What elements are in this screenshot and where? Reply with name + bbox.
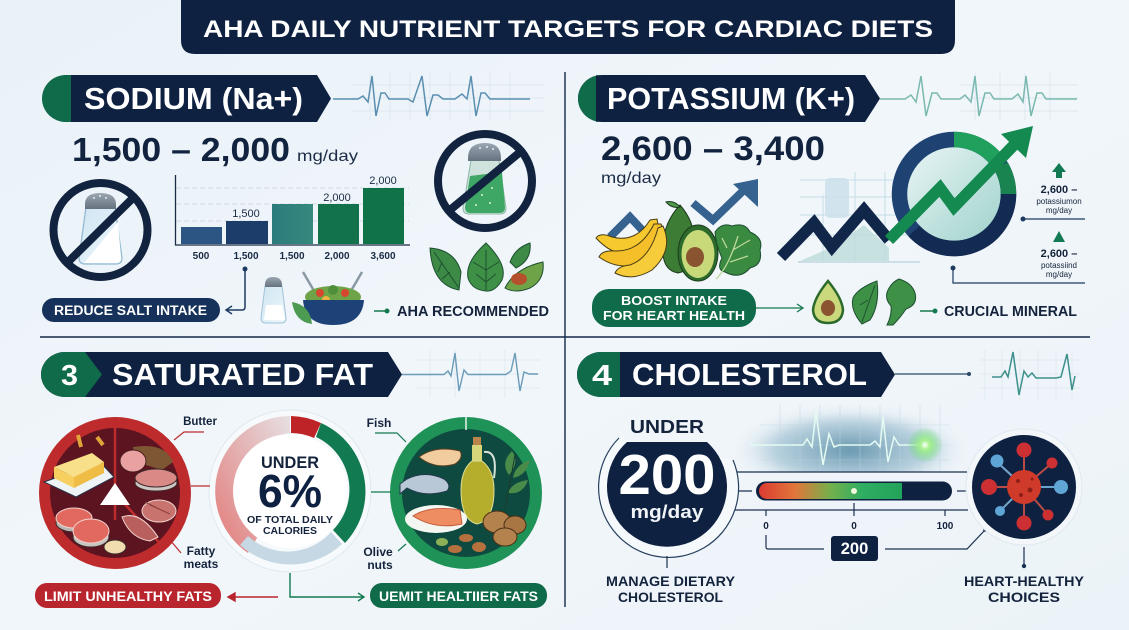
chart: 6 percent donut: UNDER	[261, 453, 319, 472]
callout: lower range label: mg/day	[1046, 270, 1072, 279]
callout: upper range label: mg/day	[1046, 206, 1072, 215]
callout: lower range label: potassiind	[1041, 261, 1077, 270]
chart: healthy fats circle	[390, 417, 542, 569]
callout: upper range label: potassiumon	[1036, 197, 1082, 206]
stat: under 200 mg/day: UNDER	[630, 417, 704, 437]
ECG glow monitor	[746, 405, 953, 472]
arrow: chart to callout	[226, 266, 248, 314]
label: heart-healthy choices: HEART-HEALTHY	[964, 573, 1085, 589]
label: olive nuts: Olive	[363, 545, 393, 559]
sodium ECG trace	[333, 73, 544, 120]
callout: boost intake: FOR HEART HEALTH	[603, 308, 745, 323]
callout: reduce salt intake	[42, 298, 220, 322]
gauge scale	[763, 503, 987, 549]
bar chart: 1,500	[232, 208, 260, 220]
potassium ECG trace	[880, 73, 1078, 120]
gauge scale: 0	[851, 521, 857, 532]
arrow: blue rising trend	[610, 179, 758, 237]
label: olive nuts: nuts	[367, 558, 393, 572]
icon: no salt right	[438, 134, 532, 228]
cholesterol heading	[577, 352, 895, 397]
callout: reduce salt intake: REDUCE SALT INTAKE	[54, 303, 207, 318]
callout: 200	[831, 536, 878, 561]
label: fatty meats: meats	[184, 557, 219, 571]
bar chart: 500	[193, 251, 210, 262]
gauge connector lines	[733, 472, 968, 510]
bar chart: 2,000	[324, 251, 350, 262]
callout: boost intake	[592, 289, 756, 327]
panel: potassium	[578, 73, 1085, 327]
stat: under 200 mg/day	[599, 417, 739, 557]
icon: bananas, avocado, spinach	[596, 202, 761, 281]
chart: 6 percent donut: OF TOTAL DAILY	[247, 514, 333, 526]
icon: no salt left	[54, 183, 148, 277]
bar chart: 1,500	[233, 251, 259, 262]
potassium target value: 2,600 – 3,400	[601, 130, 825, 168]
label: fish: Fish	[367, 416, 391, 430]
saturated fat heading: SATURATED FAT	[112, 357, 373, 392]
gauge scale: 0	[763, 521, 769, 532]
label: manage dietary cholesterol	[606, 556, 736, 605]
saturated fat heading: 3	[61, 360, 78, 392]
stat: under 200 mg/day: mg/day	[630, 502, 704, 522]
callout: healthier fats	[370, 583, 547, 608]
icon: avocado and leaves	[813, 279, 916, 325]
cholesterol ECG trace	[895, 350, 1080, 400]
sodium target value: mg/day	[297, 148, 358, 165]
label: crucial mineral: CRUCIAL MINERAL	[944, 304, 1077, 320]
callout: upper range label	[1020, 163, 1085, 222]
callout: lower range label	[950, 231, 1085, 283]
label: heart-healthy choices	[964, 547, 1085, 605]
potassium target value	[601, 130, 825, 187]
cholesterol heading: 4	[592, 360, 612, 392]
label: fish	[367, 416, 406, 492]
saturated fat ECG trace	[402, 350, 540, 398]
icon: cholesterol molecule	[966, 429, 1082, 545]
label: manage dietary cholesterol: CHOLESTEROL	[618, 589, 723, 605]
bar chart	[176, 175, 410, 262]
panel: sodium	[42, 73, 549, 325]
saturated fat heading	[41, 352, 402, 397]
chart: rising zigzag with ring	[781, 126, 1033, 262]
callout: limit unhealthy fats	[35, 583, 221, 608]
potassium heading	[578, 75, 880, 122]
label: fatty meats	[170, 540, 219, 571]
chart: 6 percent donut: 6%	[258, 465, 322, 517]
icon: salt shaker and salad bowl	[261, 272, 364, 325]
callout: limit unhealthy fats: LIMIT UNHEALTHY FATS	[44, 588, 212, 604]
callout: healthier fats: UEMIT HEALTIIER FATS	[379, 588, 538, 604]
bar chart: 2,000	[323, 192, 351, 204]
chart: unhealthy fats circle	[39, 417, 191, 569]
stat: under 200 mg/day: 200	[618, 443, 716, 507]
arrow: to unhealthy fats	[228, 593, 278, 601]
cholesterol heading: CHOLESTEROL	[632, 357, 867, 392]
bar chart: 1,500	[279, 251, 305, 262]
panel: saturated fat	[35, 350, 547, 608]
bar chart: 3,600	[370, 251, 396, 262]
label: butter: Butter	[183, 416, 217, 428]
label: butter	[174, 416, 217, 486]
label: fatty meats: Fatty	[187, 544, 216, 558]
callout: upper range label: 2,600 –	[1041, 184, 1077, 196]
icon: leafy greens	[430, 243, 543, 291]
sodium heading: SODIUM (Na+)	[84, 81, 303, 116]
chart: 6 percent donut	[209, 410, 371, 572]
title	[181, 0, 955, 54]
potassium heading: POTASSIUM (K+)	[607, 81, 855, 116]
callout: boost intake: BOOST INTAKE	[621, 293, 727, 308]
title: AHA DAILY NUTRIENT TARGETS FOR CARDIAC DIETS	[203, 16, 933, 43]
callout: 200: 200	[841, 540, 868, 558]
gauge scale: 100	[937, 521, 954, 532]
gauge bar	[756, 482, 952, 500]
arrow: to healthier fats	[290, 573, 364, 601]
label: manage dietary cholesterol: MANAGE DIETARY	[606, 573, 736, 589]
sodium heading	[42, 75, 331, 122]
potassium target value: mg/day	[601, 170, 661, 187]
label: AHA recommended: AHA RECOMMENDED	[397, 304, 549, 320]
label: olive nuts	[363, 544, 406, 572]
callout: lower range label: 2,600 –	[1041, 248, 1077, 260]
chart: 6 percent donut: CALORIES	[263, 525, 317, 537]
panel: cholesterol	[577, 350, 1085, 605]
label: heart-healthy choices: CHOICES	[988, 589, 1060, 605]
sodium target value: 1,500 – 2,000	[72, 131, 290, 168]
bar chart: 2,000	[369, 175, 397, 187]
arrow: boost to foods	[756, 304, 803, 312]
